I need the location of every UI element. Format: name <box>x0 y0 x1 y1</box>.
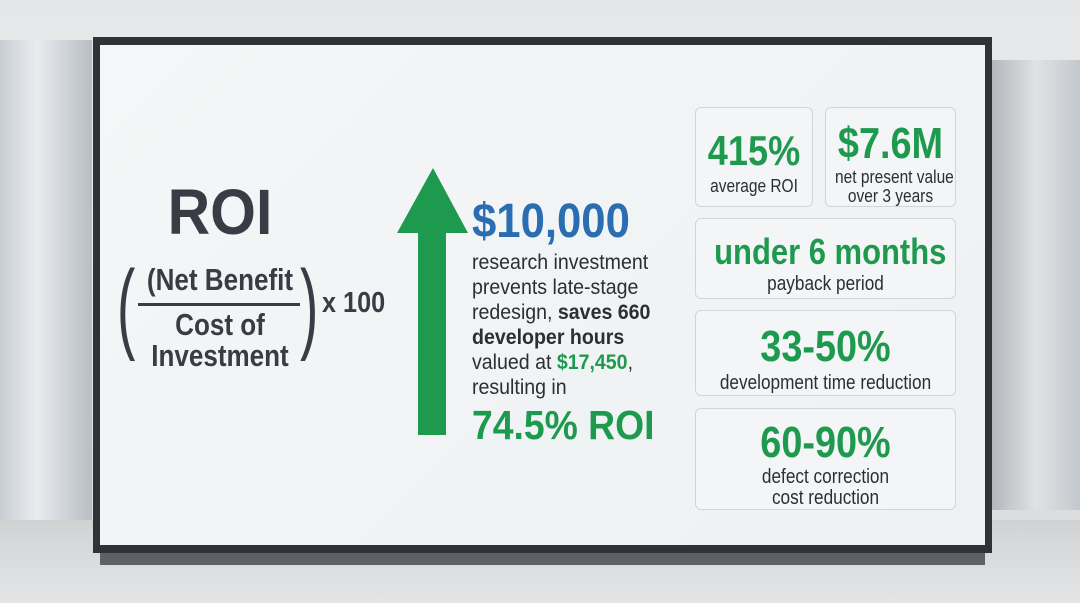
stat: 415%: average ROI <box>710 176 798 196</box>
stat: $7.6M: net present value <box>835 167 954 187</box>
background: left window <box>0 40 92 520</box>
fraction: x 100 <box>322 287 385 319</box>
case study text: $10,000 <box>472 195 630 248</box>
stat: 60-90% <box>695 408 956 510</box>
fraction: ) <box>300 250 318 362</box>
stat: 415% <box>695 107 813 207</box>
case study text: prevents late-stage <box>472 275 638 299</box>
case study text: resulting in <box>472 375 567 399</box>
stat: 33-50%: 33-50% <box>760 322 891 371</box>
floor <box>0 520 1080 603</box>
case study text: valued at $17,450, <box>472 350 633 374</box>
fraction: Investment <box>151 338 289 373</box>
formula block <box>117 176 385 373</box>
stat: $7.6M <box>825 107 956 207</box>
case study text <box>472 195 654 448</box>
stat: 60-90%: cost reduction <box>772 487 879 509</box>
title ROI: ROI <box>168 176 272 248</box>
stat: 33-50% <box>695 310 956 396</box>
case study text: 74.5% ROI <box>472 402 654 448</box>
case study text: redesign, saves 660 <box>472 300 650 324</box>
background: right window <box>992 60 1080 510</box>
stat: under 6 months <box>695 218 956 299</box>
fraction: ( <box>117 250 135 362</box>
stat: 33-50%: development time reduction <box>720 372 931 394</box>
whiteboard <box>93 37 992 553</box>
board shadow bar <box>100 545 985 565</box>
fraction: (Net Benefit <box>147 262 293 297</box>
stat: $7.6M: $7.6M <box>838 119 943 168</box>
case study text: research investment <box>472 250 648 274</box>
stat: under 6 months: payback period <box>767 273 884 295</box>
case study text: developer hours <box>472 325 624 349</box>
stat: 60-90%: defect correction <box>762 466 889 488</box>
fraction: Cost of <box>175 307 265 342</box>
stat: 60-90%: 60-90% <box>760 418 891 467</box>
stat: $7.6M: over 3 years <box>848 186 933 206</box>
stat: 415%: 415% <box>708 127 800 174</box>
icon: green up arrow <box>397 168 468 435</box>
stat: under 6 months: under 6 months <box>714 231 946 272</box>
fraction <box>117 250 385 373</box>
